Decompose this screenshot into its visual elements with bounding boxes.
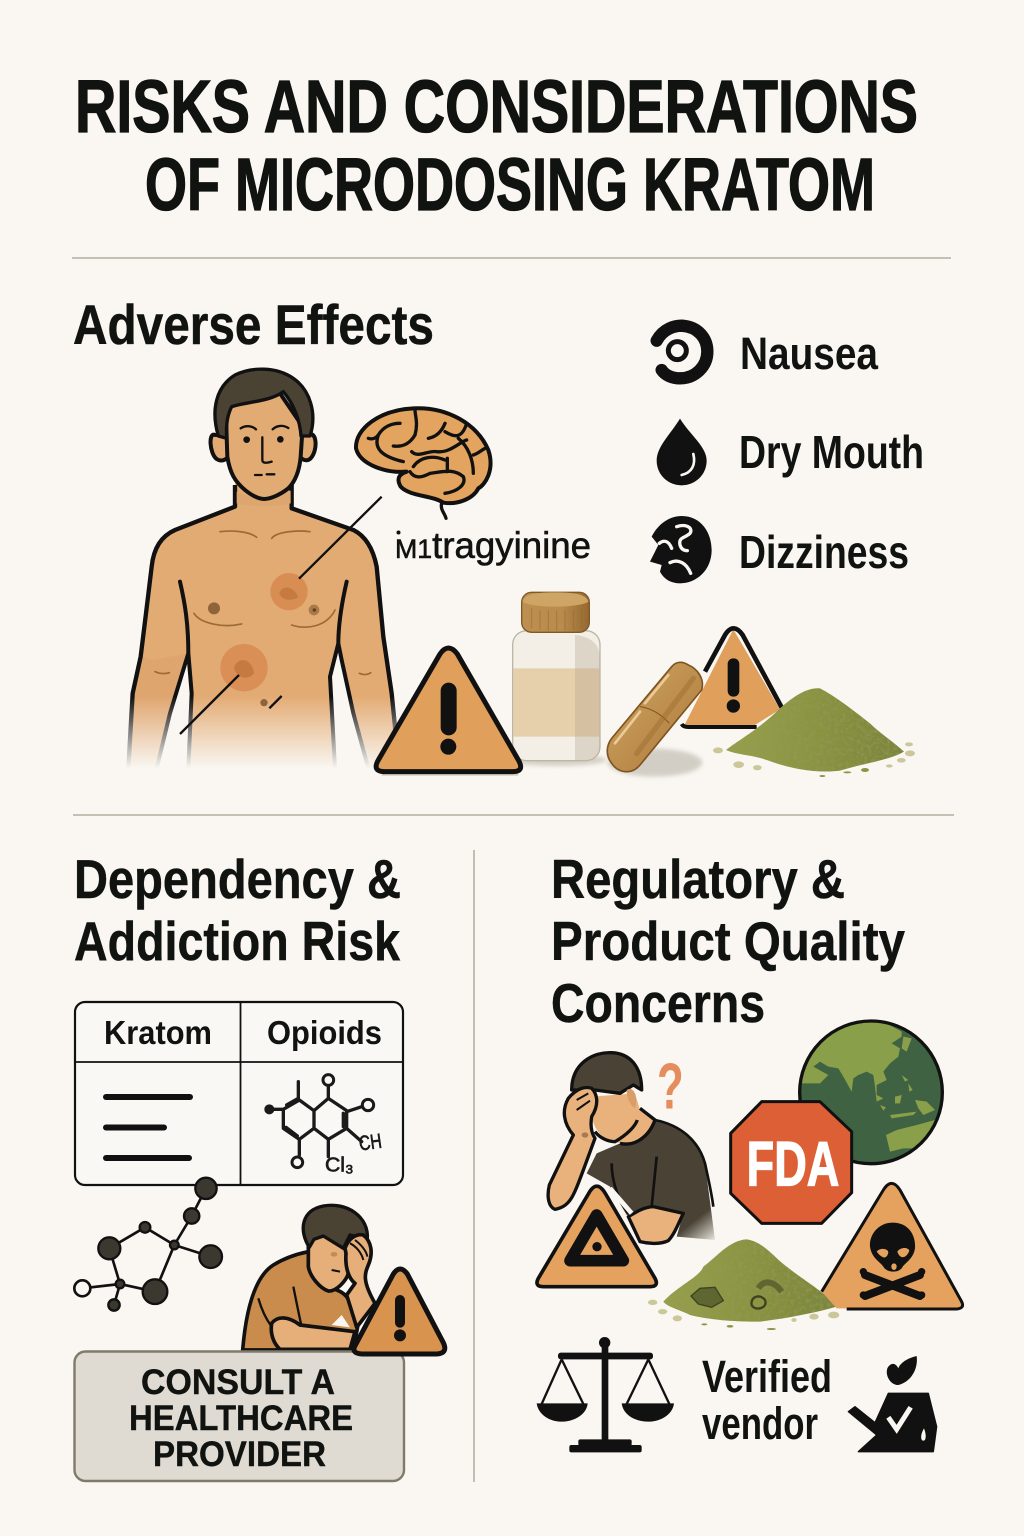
warning triangle: [376, 648, 521, 774]
text: dry mouth: Dry Mouth: [739, 426, 924, 478]
opioid molecule: [264, 1075, 383, 1177]
table header: kratom: Kratom: [104, 1014, 212, 1051]
panel: regulatory illustration: [537, 1021, 963, 1452]
heading: regulatory: Product Quality: [551, 910, 905, 972]
warning triangle: alert: [537, 1186, 656, 1287]
text: nausea: Nausea: [740, 328, 879, 379]
panel: adverse effects illustration: [128, 369, 607, 774]
heading: regulatory: Regulatory &: [551, 848, 845, 910]
callout: consult a healthcare provider: CONSULT A: [141, 1363, 335, 1402]
heading: dependency: [74, 848, 401, 972]
heading: regulatory: Concerns: [551, 972, 765, 1034]
text: verified vendor: [702, 1351, 832, 1449]
heading: dependency: Dependency &: [74, 848, 401, 910]
person with head in hand: [243, 1205, 375, 1350]
icon: FDA stop sign: FDA: [747, 1130, 839, 1200]
callout: consult a healthcare provider: [74, 1352, 404, 1481]
panel: dependency illustration: [74, 1178, 375, 1350]
icon: nausea swirl: [657, 326, 707, 378]
panel: triangle, capsule and powder: [607, 628, 915, 777]
callout: consult a healthcare provider: HEALTHCARE: [129, 1399, 353, 1438]
person confused: [548, 1053, 715, 1243]
icon: FDA stop sign: [731, 1102, 852, 1223]
warning triangle: dependency: [354, 1269, 445, 1354]
molecule: [74, 1178, 222, 1311]
icon: water drop: [657, 419, 707, 485]
icon: globe: [793, 1021, 942, 1164]
illustration: man torso: [128, 369, 397, 768]
warning triangle back: [682, 628, 782, 727]
powder with contaminants: [648, 1239, 839, 1330]
panel: comparison table: [75, 1002, 403, 1185]
label: mitragyinine: M1tragyinine: [395, 525, 591, 566]
icon: brain: [356, 408, 491, 518]
title: [75, 65, 918, 226]
icon: dizziness: [650, 516, 712, 583]
heading: dependency: Addiction Risk: [74, 910, 400, 972]
icon: question mark: ?: [657, 1049, 684, 1122]
warning triangle: skull: [822, 1183, 963, 1309]
kratom lines: [106, 1097, 190, 1158]
capsule: [607, 662, 702, 777]
bottle: [507, 592, 607, 766]
icon: scales: [537, 1337, 674, 1452]
list: symptoms: [650, 326, 924, 583]
heading: regulatory: [551, 848, 905, 1034]
opioid molecule: CH: [357, 1130, 383, 1156]
powder pile: [713, 688, 915, 777]
heading: adverse effects: Adverse Effects: [73, 293, 434, 356]
table header: opioids: Opioids: [267, 1014, 382, 1051]
text: verified vendor: Verified: [702, 1351, 832, 1402]
text: dizziness: Dizziness: [739, 526, 909, 578]
callout: consult a healthcare provider: PROVIDER: [153, 1435, 326, 1474]
text: verified vendor: vendor: [702, 1398, 818, 1449]
opioid molecule: Cl₃: [325, 1154, 354, 1177]
icon: verified vendor: [848, 1356, 937, 1452]
